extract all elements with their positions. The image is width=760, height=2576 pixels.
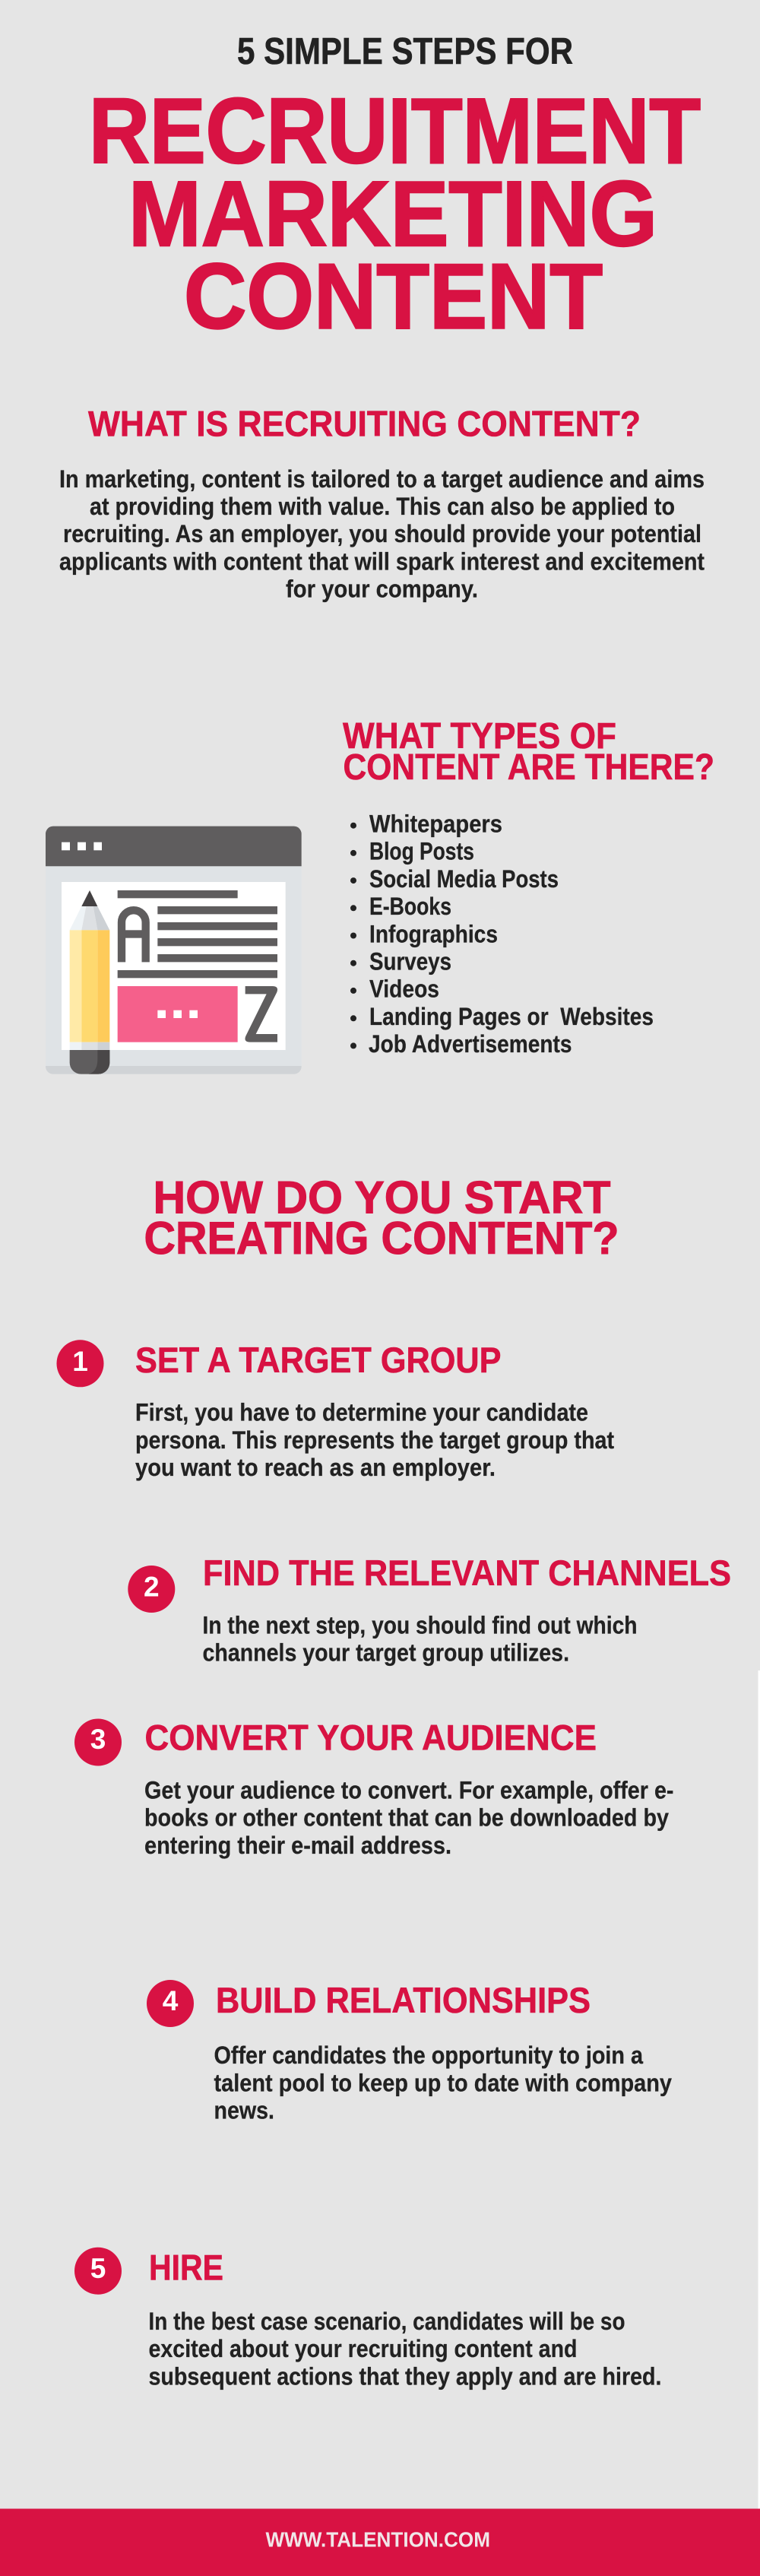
step 4 text: news.	[214, 2097, 274, 2124]
icon: browser window with pencil	[46, 826, 302, 1074]
footer url: WWW.TALENTION.COM	[266, 2527, 490, 2552]
step 2 heading: FIND THE RELEVANT CHANNELS	[203, 1553, 731, 1593]
step 4 text	[214, 2041, 672, 2124]
paragraph: at providing them with value. This can also be applied to	[90, 493, 675, 520]
bullet list: Videos	[369, 976, 439, 1003]
step 5 text: excited about your recruiting content and	[149, 2335, 578, 2362]
bullet list: Surveys	[369, 947, 451, 975]
step 1 text: persona. This represents the target group that	[135, 1426, 614, 1454]
heading: how do you start	[144, 1172, 619, 1264]
paragraph	[59, 465, 705, 602]
icon: number 4	[147, 1980, 194, 2027]
bullet list	[350, 811, 654, 1058]
paragraph: applicants with content that will spark interest and excitement	[59, 547, 705, 575]
icon: number 5: 5	[90, 2253, 106, 2284]
panel: what is recruiting content	[59, 403, 705, 602]
step 5 text: subsequent actions that they apply and are hired.	[149, 2363, 661, 2390]
heading: CONTENT ARE THERE?	[344, 747, 714, 788]
step 5 heading: HIRE	[149, 2248, 223, 2287]
step 1 heading: SET A TARGET GROUP	[135, 1340, 502, 1380]
icon: number 3	[74, 1718, 122, 1765]
bullet list: Whitepapers	[369, 811, 502, 838]
bullet list: E-Books	[369, 893, 451, 920]
step 1	[56, 1340, 614, 1481]
icon: number 2: 2	[144, 1571, 160, 1603]
step 1 text	[135, 1399, 614, 1481]
footer band	[0, 2509, 760, 2576]
paragraph: for your company.	[286, 575, 478, 602]
step 3 text	[144, 1776, 673, 1859]
main title: CONTENT	[184, 245, 603, 348]
heading: how do you start: CREATING CONTENT?	[144, 1213, 619, 1264]
bullet list: Landing Pages or Websites	[369, 1003, 654, 1030]
main title: RECRUITMENT	[89, 79, 701, 182]
bullet list: Blog Posts	[369, 838, 474, 865]
step 5 text	[149, 2308, 661, 2390]
heading: WHAT TYPES OF	[343, 716, 616, 757]
step 2 text: channels your target group utilizes.	[202, 1639, 569, 1667]
paragraph: In marketing, content is tailored to a target audience and aims	[59, 465, 705, 493]
heading: how do you start: HOW DO YOU START	[154, 1172, 611, 1223]
icon: number 2	[128, 1566, 175, 1613]
step 1 text: you want to reach as an employer.	[135, 1454, 496, 1481]
step 4 text: Offer candidates the opportunity to join a	[214, 2041, 643, 2069]
title	[89, 31, 701, 348]
step 1 text: First, you have to determine your candidate	[135, 1399, 588, 1426]
step 2 text	[202, 1612, 637, 1667]
main title: MARKETING	[128, 162, 657, 265]
icon: number 1	[56, 1340, 103, 1387]
bullet list: Job Advertisements	[369, 1030, 572, 1058]
paragraph: recruiting. As an employer, you should provide your potential	[63, 520, 701, 547]
step 3 text: entering their e-mail address.	[144, 1832, 451, 1859]
step 2 text: In the next step, you should find out which	[202, 1612, 637, 1639]
icon: number 4: 4	[163, 1985, 179, 2016]
step 4 text: talent pool to keep up to date with company	[214, 2070, 672, 2097]
bullet list: Infographics	[369, 920, 498, 947]
icon: number 1: 1	[72, 1346, 88, 1377]
icon: number 5	[74, 2248, 122, 2295]
heading	[343, 716, 714, 788]
step 2	[128, 1553, 731, 1667]
step 3	[74, 1717, 673, 1859]
title kicker: 5 SIMPLE STEPS FOR	[237, 31, 573, 72]
step 4	[147, 1980, 672, 2124]
step 5	[74, 2248, 661, 2390]
step 4 heading: BUILD RELATIONSHIPS	[216, 1980, 591, 2020]
step 3 text: books or other content that can be downloaded by	[144, 1804, 669, 1831]
bullet list: Social Media Posts	[369, 865, 559, 893]
step 3 text: Get your audience to convert. For example, offer e-	[144, 1776, 673, 1804]
main title	[89, 79, 701, 348]
heading: WHAT IS RECRUITING CONTENT?	[88, 403, 641, 444]
panel: content types	[46, 716, 714, 1074]
step 3 heading: CONVERT YOUR AUDIENCE	[144, 1717, 597, 1758]
step 5 text: In the best case scenario, candidates will be so	[149, 2308, 625, 2335]
icon: number 3: 3	[90, 1724, 106, 1755]
